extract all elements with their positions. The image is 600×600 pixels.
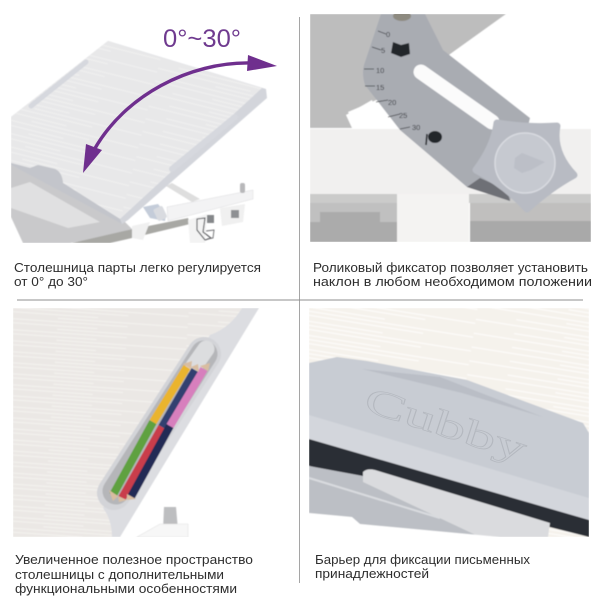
tray slot — [363, 469, 550, 537]
dark gap — [309, 439, 589, 537]
white bar — [310, 129, 591, 194]
handles — [31, 62, 86, 106]
white base — [309, 513, 500, 537]
bracket illustration — [310, 11, 591, 242]
scale marks: 20 — [388, 98, 396, 107]
scale marks: 15 — [376, 83, 384, 92]
caption: функциональными особенностями — [15, 581, 237, 596]
caption: Увеличенное полезное пространство — [15, 552, 253, 567]
bottom pad — [11, 163, 122, 224]
slot — [421, 72, 492, 122]
star knob — [476, 123, 574, 209]
panel: pencil pocket — [13, 308, 259, 596]
rim — [103, 308, 259, 537]
panel: roller lock — [310, 11, 592, 289]
panel: barrier — [309, 308, 589, 581]
desk tilt illustration — [11, 41, 267, 243]
lower tray — [311, 466, 364, 480]
panel: tilt range — [11, 25, 277, 289]
wood surface — [13, 308, 242, 537]
pencil tips — [109, 361, 210, 502]
double-headed tilt arrow — [83, 55, 277, 173]
caption: от 0° до 30° — [14, 274, 88, 289]
scale marks: 5 — [381, 46, 385, 55]
embossed logo: Cubby — [359, 380, 532, 471]
pivot bolt — [392, 14, 412, 22]
lower band — [310, 202, 398, 222]
icon: palette — [426, 131, 442, 145]
wood surface — [309, 308, 589, 537]
groove — [370, 370, 531, 413]
icon: book — [391, 42, 410, 57]
barrier illustration — [309, 308, 589, 537]
drawer — [11, 165, 135, 243]
caption: принадлежностей — [315, 566, 429, 581]
caption: Барьер для фиксации письменных — [315, 552, 530, 567]
support arm — [132, 183, 253, 243]
scale marks: 10 — [376, 66, 384, 75]
scale marks: 30 — [412, 123, 420, 132]
caption: наклон в любом необходимом положении — [313, 274, 592, 289]
scale marks: 25 — [399, 111, 407, 120]
caption: Столешница парты легко регулируется — [14, 260, 261, 275]
base block — [137, 524, 188, 537]
pencils — [113, 367, 204, 498]
barrier front — [309, 415, 589, 524]
desktop illustration — [13, 308, 259, 537]
angle label: 0°~30° — [163, 25, 241, 53]
barrier top — [309, 357, 589, 510]
lamp post — [162, 506, 178, 524]
slide rail — [72, 218, 190, 243]
scale marks: 0 — [386, 30, 390, 39]
caption: Роликовый фиксатор позволяет установить — [313, 260, 588, 275]
wood surface — [11, 41, 262, 219]
scale plate — [363, 14, 530, 201]
scale marks — [364, 30, 420, 132]
desk rim — [120, 88, 268, 224]
pocket — [114, 354, 204, 493]
caption: столешницы с дополнительными — [15, 567, 224, 582]
